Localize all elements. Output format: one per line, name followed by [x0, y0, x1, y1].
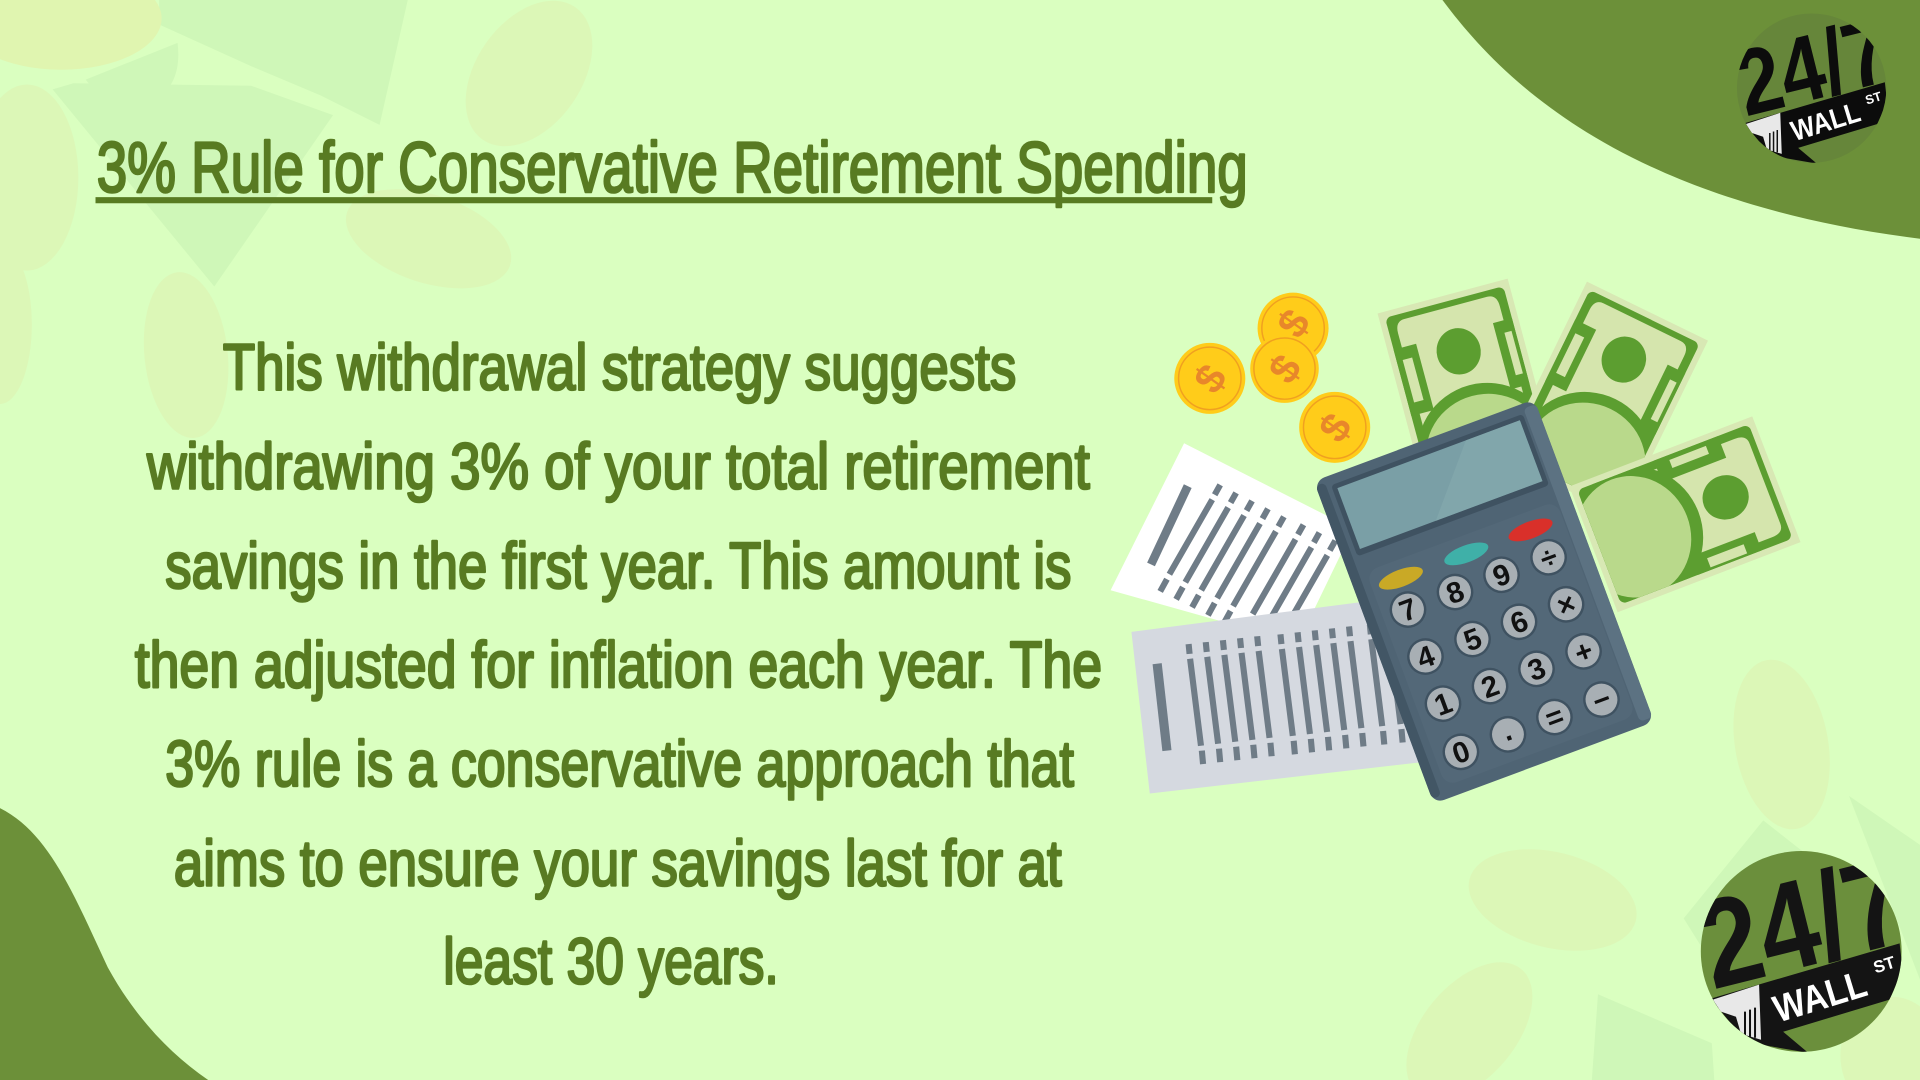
number keys: 8	[1442, 575, 1469, 611]
number keys: .	[1497, 714, 1516, 748]
logo: top right: WALL	[1787, 97, 1864, 148]
number keys: −	[1588, 682, 1616, 719]
body text: 3% rule is a conservative approach that	[165, 727, 1074, 800]
icon: grey receipt	[1131, 600, 1427, 793]
icon: gold coins: $	[1309, 404, 1361, 450]
body text: withdrawing 3% of your total retirement	[146, 430, 1090, 503]
icon: banknote lower	[1572, 416, 1800, 612]
logo: bottom right	[1700, 851, 1902, 1052]
body text: then adjusted for inflation each year. The	[135, 628, 1102, 701]
body text	[135, 330, 1102, 997]
corner shape: top right	[1442, 0, 1920, 239]
number keys	[1386, 535, 1624, 774]
number keys: 5	[1459, 622, 1486, 658]
number keys: ×	[1553, 587, 1580, 624]
number keys: =	[1541, 699, 1569, 736]
body text: This withdrawal strategy suggests	[223, 330, 1016, 403]
number keys: +	[1570, 634, 1598, 671]
number keys: 6	[1506, 604, 1533, 641]
body text: aims to ensure your savings last for at	[174, 826, 1062, 899]
icon: calculator	[1314, 399, 1654, 804]
icon: gold coins: $	[1259, 346, 1311, 392]
title: 3% Rule for Conservative Retirement Spending	[97, 129, 1248, 208]
number keys: 3	[1523, 651, 1550, 688]
function buttons	[1376, 514, 1555, 594]
number keys: 0	[1448, 734, 1475, 771]
corner shape: bottom left	[0, 808, 208, 1080]
logo: top right	[1737, 14, 1886, 163]
keypad panel	[1366, 501, 1636, 786]
number keys: 9	[1488, 557, 1515, 594]
icon: gold coins: $	[1267, 300, 1319, 346]
icon: banknote right	[1528, 282, 1708, 492]
screen	[1337, 420, 1542, 549]
number keys: 4	[1412, 639, 1440, 676]
number keys: 7	[1395, 592, 1422, 629]
icon: banknote left	[1378, 278, 1536, 444]
number keys: 1	[1430, 686, 1457, 723]
body text: savings in the first year. This amount is	[165, 529, 1071, 602]
body text: least 30 years.	[443, 924, 779, 997]
number keys: ÷	[1536, 540, 1562, 576]
logo: bottom right: ST	[1871, 953, 1898, 977]
icon: gold coins: $	[1184, 356, 1236, 401]
number keys: 2	[1477, 669, 1504, 705]
icon: gold coins	[1174, 293, 1370, 463]
logo: bottom right: WALL	[1768, 962, 1872, 1031]
icon: white receipt	[1111, 443, 1353, 647]
logo: top right: ST	[1864, 89, 1884, 107]
